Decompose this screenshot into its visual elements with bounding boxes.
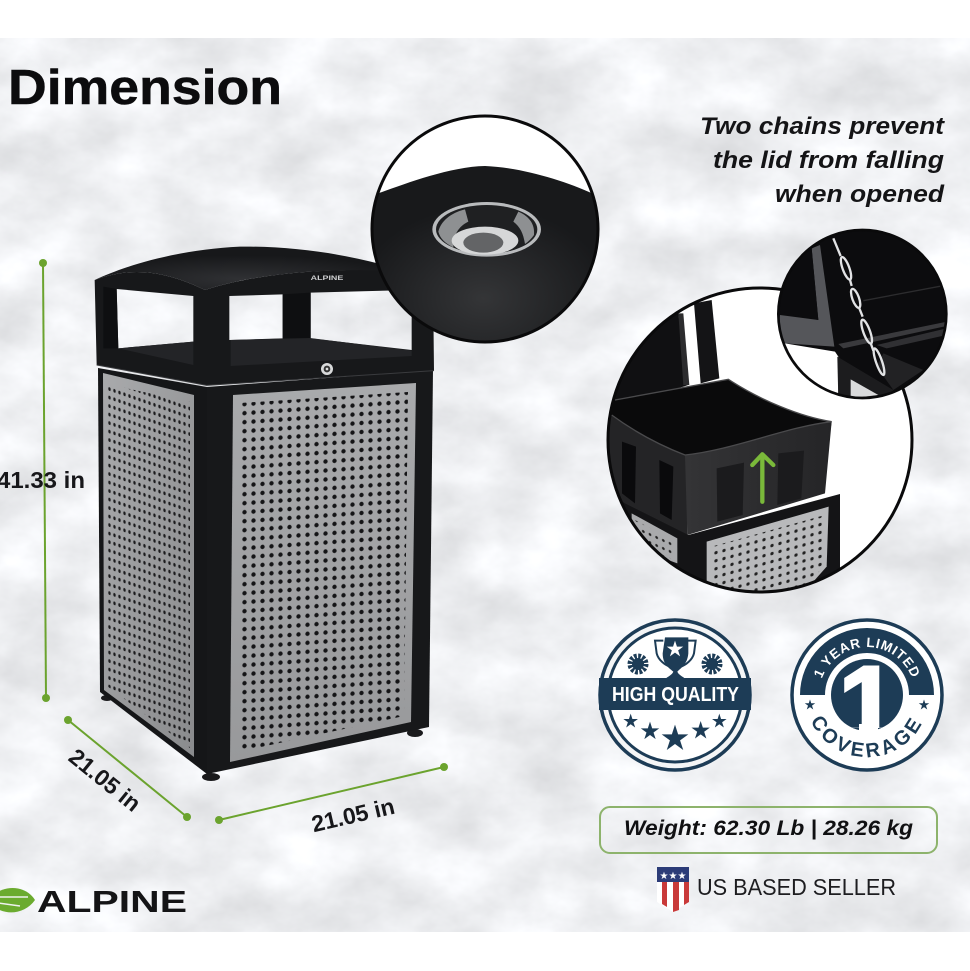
width dimension: 21.05 in xyxy=(309,793,397,837)
center number xyxy=(831,659,903,730)
hood behind liner xyxy=(614,300,720,400)
ribbon text: 1 YEAR LIMITED xyxy=(814,638,919,678)
callout: chains caption: Two chains prevent xyxy=(700,113,945,140)
plastic liner xyxy=(600,379,832,535)
brand logo xyxy=(0,884,187,919)
icon: green leaf xyxy=(0,888,35,912)
center number: 1 xyxy=(839,645,897,763)
sunburst right xyxy=(705,657,719,671)
icon: US flag shield xyxy=(657,867,689,912)
title: Dimension xyxy=(8,61,282,115)
can lock xyxy=(321,363,333,375)
badge: high quality xyxy=(599,620,751,770)
weight box: Weight: 62.30 Lb | 28.26 kg xyxy=(624,817,913,840)
can logo: ALPINE xyxy=(311,276,343,282)
ribbon band xyxy=(599,678,751,710)
circle: removable liner xyxy=(600,273,912,597)
arc ribbon xyxy=(800,628,934,695)
can hood and roof xyxy=(95,247,434,385)
side stars xyxy=(805,700,929,709)
circle: ashtray detail xyxy=(370,114,600,344)
callout: chains caption: when opened xyxy=(775,181,945,208)
coverage text: COVERAGE xyxy=(812,716,922,758)
depth dimension xyxy=(64,716,191,821)
callout: chains caption xyxy=(700,113,945,208)
trophy icon xyxy=(655,637,696,679)
depth dimension: 21.05 in xyxy=(64,743,146,817)
badge: warranty xyxy=(790,618,944,772)
trash can xyxy=(95,247,434,781)
weight box xyxy=(600,807,937,853)
icon: US flag shield: ★★★ xyxy=(660,871,686,882)
sunburst left xyxy=(631,657,645,671)
circle: lid chain detail xyxy=(773,230,947,402)
ribbon band: HIGH QUALITY xyxy=(612,684,740,706)
seller text: US BASED SELLER xyxy=(697,874,896,900)
callout: chains caption: the lid from falling xyxy=(713,147,944,174)
ashtray bowl xyxy=(432,202,541,257)
brand logo: ALPINE xyxy=(37,884,187,919)
height dimension xyxy=(0,259,85,702)
can frame and panels xyxy=(623,494,840,590)
can feet xyxy=(101,695,423,781)
five stars xyxy=(623,714,727,750)
arrow: lift up xyxy=(752,454,773,502)
can body xyxy=(98,368,433,774)
chain xyxy=(833,238,886,376)
width dimension xyxy=(215,763,448,837)
